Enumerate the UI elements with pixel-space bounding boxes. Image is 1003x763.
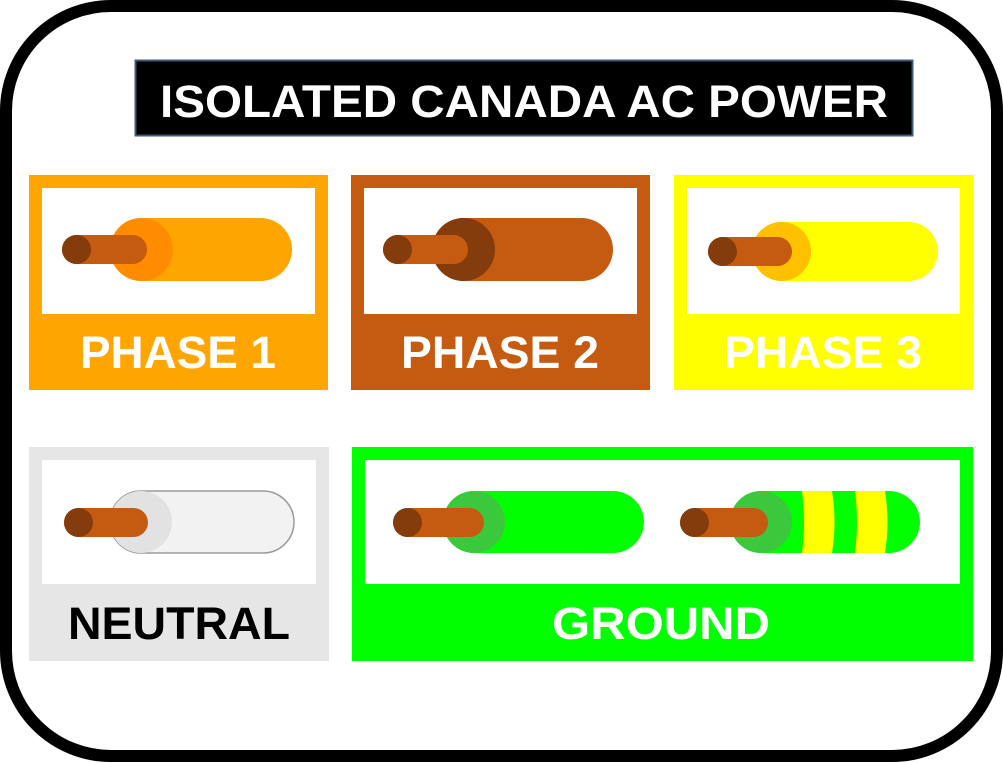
icon: white wire bbox=[64, 491, 294, 553]
panel: ground bbox=[352, 447, 973, 661]
panel: neutral: NEUTRAL bbox=[68, 598, 290, 649]
icon: orange wire bbox=[62, 218, 292, 281]
panel: phase 1 bbox=[29, 175, 328, 390]
panel: phase 2 bbox=[351, 175, 650, 390]
panel: ground: GROUND bbox=[552, 598, 770, 649]
panel: phase 3: PHASE 3 bbox=[724, 327, 922, 378]
panel: phase 1: PHASE 1 bbox=[80, 327, 276, 378]
title: ISOLATED CANADA AC POWER bbox=[160, 76, 888, 127]
icon: yellow wire bbox=[708, 222, 938, 281]
panel: phase 3 bbox=[674, 175, 973, 390]
panel: neutral bbox=[29, 447, 329, 661]
icon: green-yellow wire bbox=[680, 491, 920, 553]
icon: brown wire bbox=[383, 218, 613, 281]
icon: green wire bbox=[393, 491, 644, 553]
title bbox=[136, 60, 912, 136]
panel: phase 2: PHASE 2 bbox=[401, 327, 599, 378]
